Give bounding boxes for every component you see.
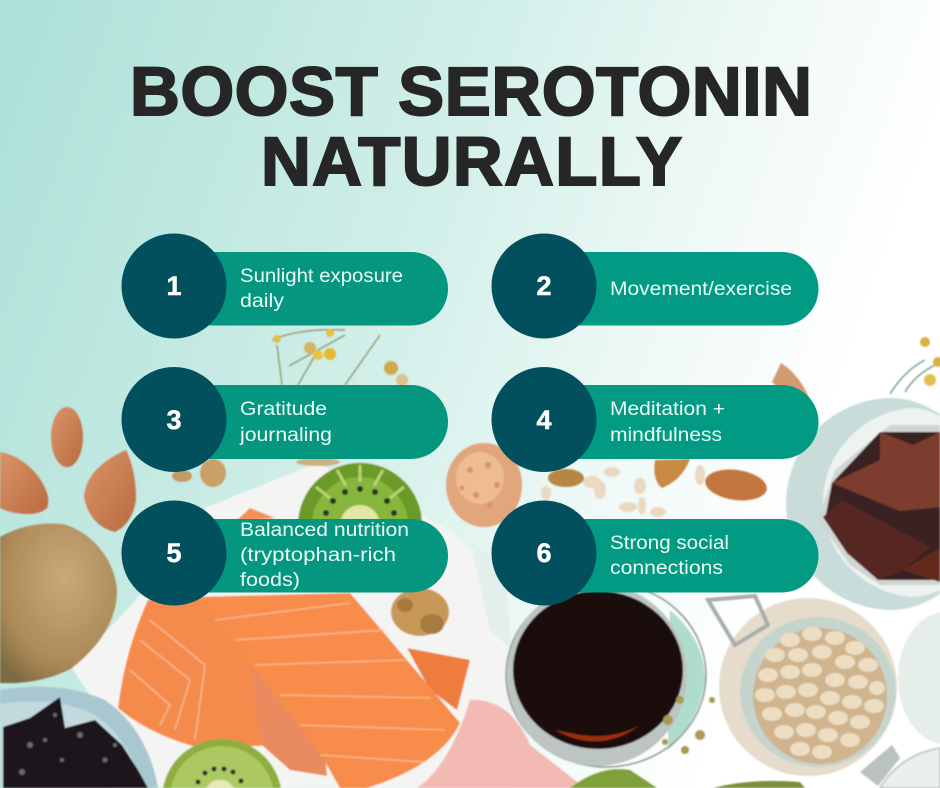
flowers top right <box>890 337 940 394</box>
item 2: 2 <box>536 271 552 301</box>
food photo collage <box>0 329 940 788</box>
item 6: Strong social <box>610 533 729 554</box>
item 5: foods) <box>240 570 300 591</box>
flowers top centre <box>272 329 408 386</box>
item 4: 4 <box>536 405 552 435</box>
oats and almonds centre <box>541 363 810 517</box>
item 6: 6 <box>536 538 552 568</box>
item 3 <box>122 367 448 472</box>
title: BOOST SEROTONIN <box>130 53 812 130</box>
chocolate bowl <box>786 398 940 610</box>
walnut under pill <box>391 588 449 636</box>
whole kiwi <box>0 524 117 683</box>
almonds left <box>0 407 136 532</box>
item 5: 5 <box>166 538 182 568</box>
dried herbs <box>662 696 715 754</box>
dark drink glass <box>506 583 706 767</box>
item 3: journaling <box>239 425 332 446</box>
item 1: daily <box>240 291 285 312</box>
paper sheet <box>72 463 512 788</box>
item 3: Gratitude <box>240 399 327 420</box>
salmon fillets <box>118 508 470 788</box>
bottom greens <box>713 781 805 788</box>
title <box>130 53 812 200</box>
item 4: Meditation + <box>610 399 725 420</box>
milk glass <box>898 612 940 744</box>
walnut round <box>446 443 522 527</box>
oats jar <box>708 596 900 786</box>
item 4 <box>492 367 818 472</box>
chicken breast <box>417 700 585 788</box>
item 6 <box>492 500 818 606</box>
lower jar <box>880 748 940 788</box>
kiwi slice lower <box>163 739 281 788</box>
item 5: (tryptophan-rich <box>240 545 396 566</box>
item 2: Movement/exercise <box>610 279 792 300</box>
item 2 <box>492 234 818 338</box>
item 4: mindfulness <box>610 425 722 446</box>
prunes bowl <box>0 687 158 788</box>
item 1: 1 <box>166 271 182 301</box>
item 5: Balanced nutrition <box>240 520 409 541</box>
item 6: connections <box>610 558 723 579</box>
item 1: Sunlight exposure <box>240 266 403 287</box>
kiwi slice upper <box>298 463 422 587</box>
item 1 <box>122 234 448 338</box>
item 3: 3 <box>166 405 182 435</box>
item 5 <box>122 500 448 606</box>
title: NATURALLY <box>261 123 682 200</box>
walnut bits <box>172 458 340 487</box>
